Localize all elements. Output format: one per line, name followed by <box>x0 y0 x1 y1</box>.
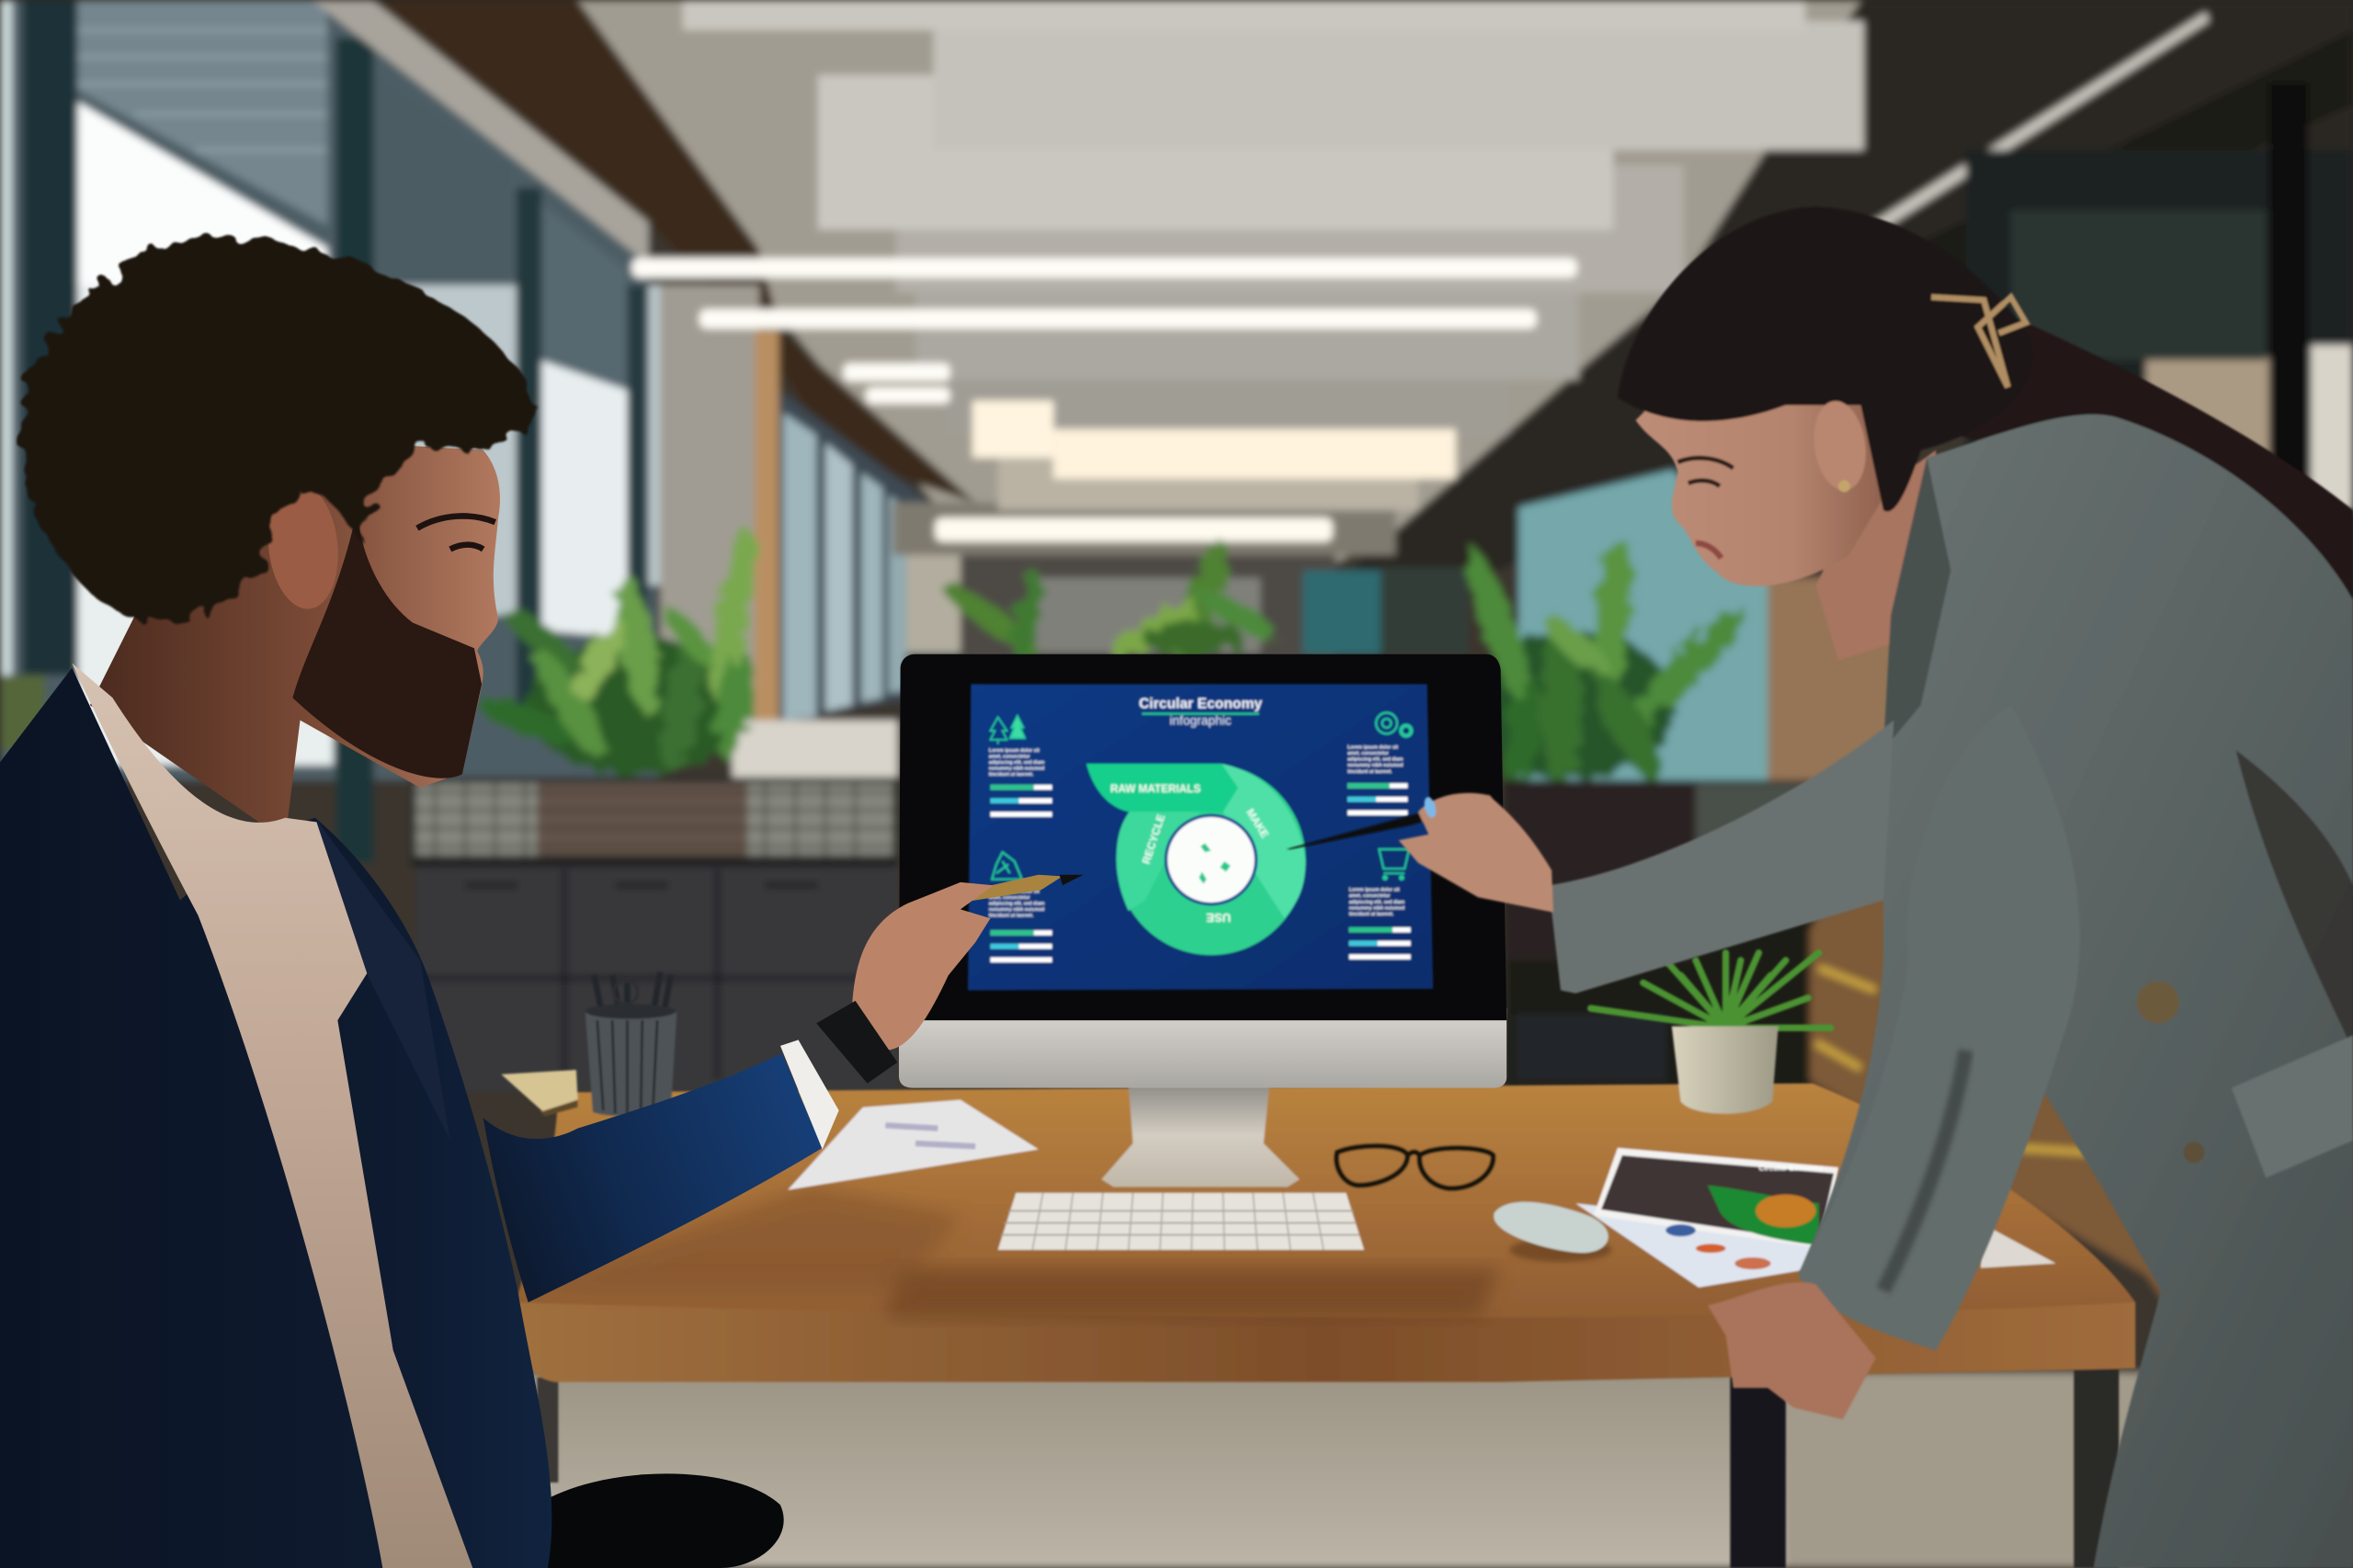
potted plant <box>1591 953 1831 1114</box>
stool <box>533 1473 784 1568</box>
woman's coat body <box>1798 415 2353 1568</box>
block: bottom left: nonummy nibh euismod <box>989 907 1044 913</box>
paper left <box>788 1100 1039 1190</box>
table legs <box>537 1369 2119 1568</box>
man's watch <box>816 1001 897 1084</box>
ceiling: right dark structure <box>1350 0 2353 570</box>
coat: shading folds <box>2236 750 2353 1051</box>
woman's ear <box>1808 398 1871 494</box>
man's sleeve <box>483 1053 823 1302</box>
far corridor <box>961 548 1468 660</box>
block: top right: tincidunt ut laoreet. <box>1347 769 1392 775</box>
man's cuff <box>780 1040 839 1150</box>
circular economy diagram <box>1086 764 1305 955</box>
ceiling: right pipe <box>1869 12 2209 234</box>
diagram leaves <box>1199 843 1231 884</box>
ceiling: soffit edge <box>313 0 648 264</box>
block: bottom right: Lorem ipsum dolor sit <box>1349 888 1400 893</box>
block: top left: adipiscing elit, sed diam <box>989 760 1045 766</box>
block: top left: nonummy nibh euismod <box>989 766 1044 771</box>
block: bottom right <box>1349 888 1411 960</box>
icon: trees <box>991 716 1025 744</box>
ceiling: brown timber beam <box>372 0 975 503</box>
keyboard <box>998 1193 1364 1250</box>
monitor <box>899 654 1506 1088</box>
woman's ponytail <box>1905 285 2353 645</box>
floor right <box>1786 1373 2146 1568</box>
woman <box>1286 207 2353 1568</box>
mouse <box>1494 1202 1611 1262</box>
printed infographic sheets: Circular Economy <box>1758 1164 1824 1172</box>
coat: lapel <box>1883 458 1950 750</box>
teal wall <box>1518 470 1771 788</box>
block: top right: amet, consectetur <box>1347 751 1389 756</box>
ceiling <box>570 0 1876 570</box>
monitor reflection on table <box>885 1267 1501 1317</box>
monitor stand <box>1101 1084 1300 1187</box>
background plant: left <box>475 527 765 775</box>
woman's pen <box>1286 794 1493 849</box>
coat: lower button <box>2184 1142 2204 1163</box>
man's pen <box>925 875 1084 908</box>
woman's upper hand <box>1399 793 1553 913</box>
woman's eye and brow <box>1677 458 1733 486</box>
woman's earring <box>1838 480 1850 492</box>
block: top left <box>989 748 1051 817</box>
man's beard <box>292 510 482 778</box>
background plants: centre <box>937 536 1283 667</box>
block: bottom right: adipiscing elit, sed diam <box>1349 900 1404 905</box>
ceiling: dark beam under pipe <box>1893 30 2353 285</box>
ceiling baffle panels <box>683 0 1864 555</box>
block: top right <box>1347 745 1407 815</box>
diagram label: use: USE <box>1206 911 1231 925</box>
wood pillar right <box>1768 578 1895 788</box>
block: top left: Lorem ipsum dolor sit <box>989 748 1040 754</box>
coat: far arm sleeve <box>1549 721 1893 994</box>
ceiling light strips <box>631 258 1577 541</box>
block: top left: tincidunt ut laoreet. <box>989 772 1034 778</box>
man's jacket <box>0 667 551 1568</box>
concrete column <box>660 285 759 735</box>
block: bottom left <box>989 889 1051 962</box>
block: top right: nonummy nibh euismod <box>1347 763 1403 768</box>
block: bottom left: adipiscing elit, sed diam <box>989 901 1045 906</box>
block: bottom right: amet, consectetur <box>1349 893 1390 899</box>
floor behind woman <box>1810 780 2353 1568</box>
block: top left: amet, consectetur <box>989 754 1030 759</box>
shadow under man's sleeve <box>525 1186 961 1290</box>
man's ear <box>262 480 344 612</box>
block: top right: Lorem ipsum dolor sit <box>1347 745 1398 751</box>
woman's hair <box>1618 207 2033 512</box>
monitor screen <box>968 684 1433 990</box>
man's shirt <box>72 664 472 1568</box>
printed infographic sheets <box>1575 1148 2056 1288</box>
table front edge <box>510 1302 2135 1382</box>
floor markings <box>1816 968 2089 1153</box>
monitor bezel <box>899 654 1506 1020</box>
notebook <box>501 1070 578 1117</box>
glass wall far right <box>1966 83 2353 510</box>
eyeglasses <box>1336 1146 1494 1188</box>
block: bottom right: nonummy nibh euismod <box>1349 905 1404 911</box>
block: top right: adipiscing elit, sed diam <box>1347 757 1404 763</box>
far window row <box>779 390 961 721</box>
hair clip <box>1931 297 2026 387</box>
coat: button <box>2137 982 2179 1023</box>
table top surface <box>510 1084 2135 1321</box>
icon: recycle <box>992 852 1022 880</box>
diagram label: raw materials: RAW MATERIALS <box>1110 783 1200 795</box>
coat: near arm fold <box>1883 1051 1966 1290</box>
icon: gears <box>1376 712 1411 736</box>
man's neck and face <box>90 443 500 840</box>
woman's neck <box>1816 450 1936 660</box>
table <box>501 953 2135 1568</box>
block: bottom left: Lorem ipsum dolor sit <box>989 889 1040 894</box>
pen holder <box>585 972 676 1117</box>
woman's lips <box>1696 543 1722 558</box>
man's eye and brow <box>417 516 495 550</box>
block: bottom left: amet, consectetur <box>989 895 1030 901</box>
coat: pocket <box>2232 1035 2353 1178</box>
man's hand <box>852 882 994 1051</box>
desk behind plant <box>733 721 897 783</box>
block: bottom left: tincidunt ut laoreet. <box>989 913 1034 918</box>
woman's nail <box>1422 796 1438 819</box>
monitor chin <box>899 1008 1506 1088</box>
floor <box>510 1373 1801 1568</box>
window wall left <box>0 0 664 863</box>
cabinet and planter left <box>413 780 897 1091</box>
man's lapel <box>315 818 450 1141</box>
woman's face <box>1636 360 1893 586</box>
block: bottom right: tincidunt ut laoreet. <box>1349 912 1394 917</box>
coat: near arm highlight <box>1798 705 2080 1350</box>
screen title: infographic <box>1170 714 1232 728</box>
diagram label: recycle: RECYCLE <box>1141 812 1167 866</box>
screen title <box>1139 697 1262 728</box>
woman's lower hand <box>1708 1282 1876 1419</box>
man <box>0 237 1084 1568</box>
man's hair <box>22 237 536 621</box>
screen title: Circular Economy <box>1139 697 1262 712</box>
diagram label: make: MAKE <box>1244 807 1271 840</box>
wood column edge <box>755 330 779 728</box>
icon: cart <box>1379 849 1409 880</box>
background plant: right <box>1455 536 1758 791</box>
dark cabinet right <box>1506 780 1813 1088</box>
